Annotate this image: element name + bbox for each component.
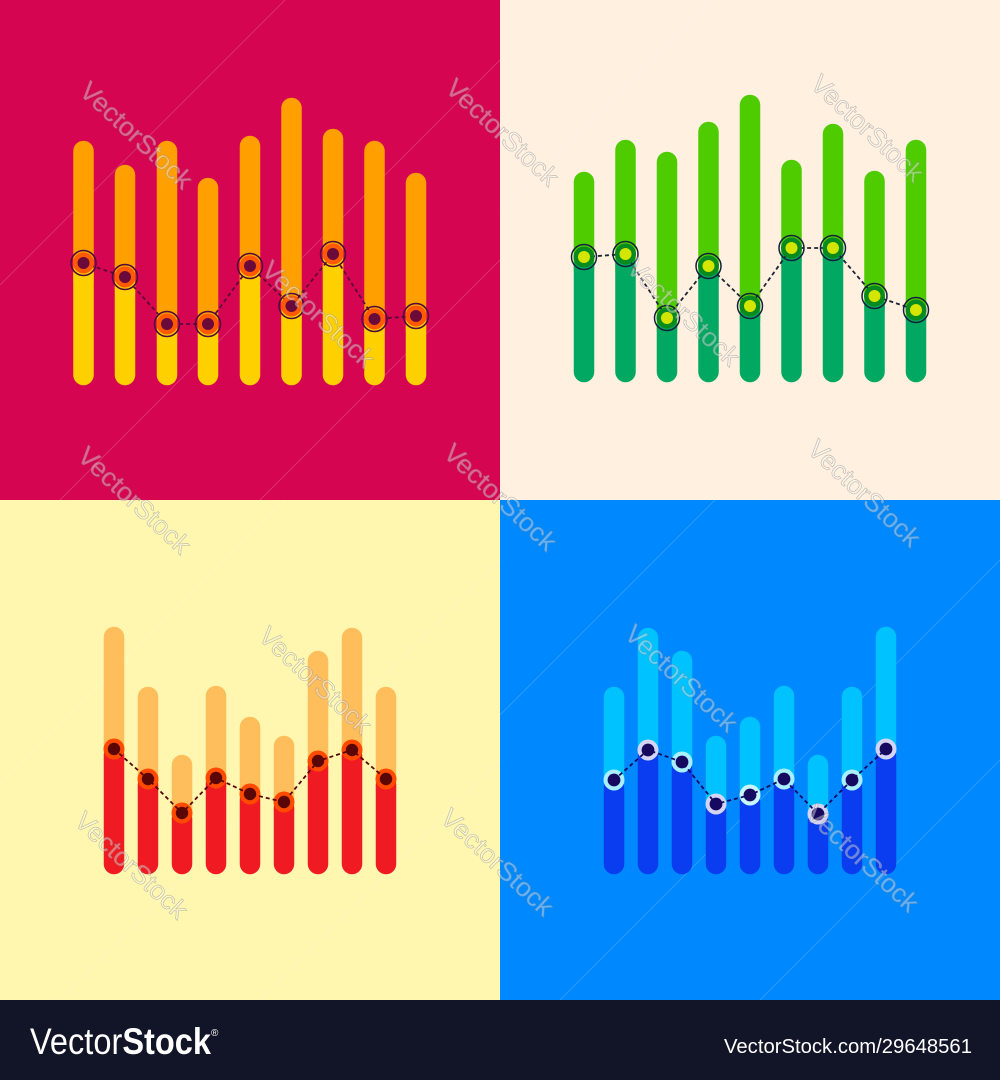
registered mark: ®	[211, 1028, 219, 1039]
dashed line	[614, 749, 886, 814]
lower bars	[114, 755, 386, 864]
data points	[108, 743, 392, 819]
chart: blue panel bars and line	[604, 637, 896, 864]
watermarks: VectorStock	[253, 620, 379, 741]
footer bar	[0, 1000, 1000, 1080]
panel: pale yellow chart background	[0, 500, 500, 1000]
watermarks: VectorStock	[621, 252, 747, 373]
data points	[71, 242, 428, 336]
watermarks: VectorStock	[619, 618, 745, 739]
footer image id: VectorStock.com/29648561	[724, 1036, 972, 1058]
watermarks: VectorStock	[800, 798, 926, 919]
watermarks: VectorStock	[256, 254, 382, 375]
chart: crimson panel bars and line	[71, 108, 428, 375]
upper bars	[584, 105, 916, 330]
dashed line	[114, 749, 386, 813]
data points	[608, 743, 892, 820]
watermarks: VectorStock	[435, 802, 561, 923]
watermarks: VectorStock	[802, 433, 928, 554]
lower bars	[584, 257, 916, 372]
panel: blue chart background	[500, 500, 1000, 1000]
panel: crimson chart background	[0, 0, 500, 500]
chart: cream panel bars and line	[572, 105, 928, 372]
watermarks	[69, 68, 931, 926]
dashed line	[584, 248, 916, 318]
watermarks: VectorStock	[805, 68, 931, 189]
footer logo: VectorStock	[30, 1021, 211, 1062]
dashed line	[84, 254, 416, 324]
data points	[572, 236, 928, 330]
upper bars	[614, 637, 886, 820]
watermarks: VectorStock	[74, 75, 200, 196]
watermarks: VectorStock	[438, 437, 564, 558]
watermarks: VectorStock	[72, 440, 198, 561]
watermarks: VectorStock	[69, 805, 195, 926]
data point halos	[604, 738, 896, 824]
data point halos	[104, 738, 396, 824]
chart: pale yellow panel bars and line	[104, 637, 396, 864]
panel: cream chart background	[500, 0, 1000, 500]
lower bars	[614, 755, 886, 864]
upper bars	[84, 108, 416, 335]
lower bars	[84, 263, 416, 375]
upper bars	[114, 637, 386, 820]
watermarks: VectorStock	[440, 72, 566, 193]
